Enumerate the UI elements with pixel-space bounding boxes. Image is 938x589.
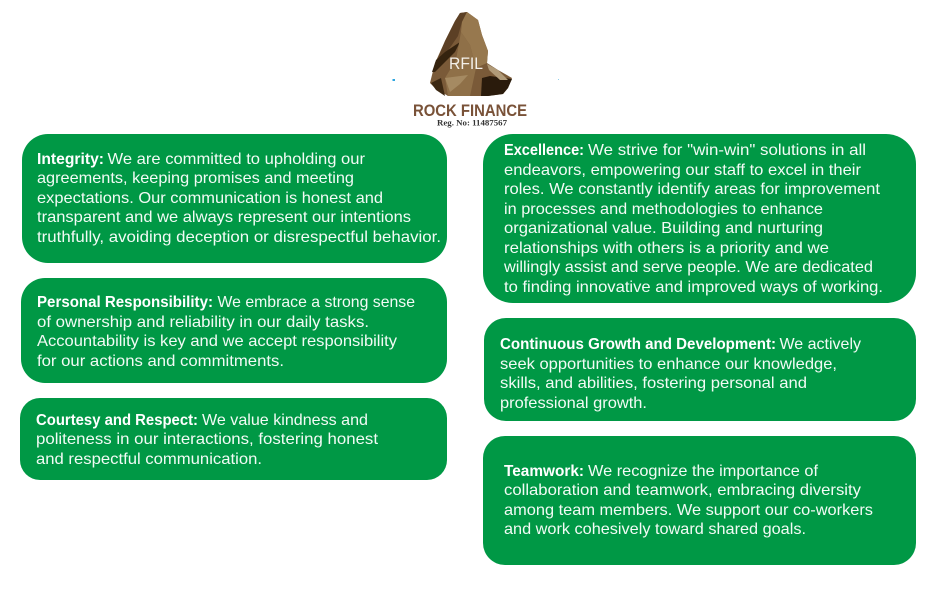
panel: excellence: roles. We constantly identify areas for improvement	[504, 181, 881, 198]
panel: courtesy and respect: politeness in our interactions, fostering honest	[36, 431, 379, 448]
panel: continuous growth and development	[484, 318, 916, 421]
panel: teamwork: collaboration and teamwork, embracing diversity	[504, 482, 861, 499]
panel: excellence: We strive for "win-win" solutions in all	[588, 142, 866, 159]
panel: integrity: transparent and we always represent our intentions	[37, 209, 411, 226]
panel: integrity	[22, 134, 447, 263]
panel: integrity: agreements, keeping promises and meeting	[37, 170, 354, 187]
panel: personal responsibility	[21, 278, 447, 383]
panel: teamwork: We recognize the importance of	[588, 463, 819, 480]
panel: personal responsibility: Personal Responsibility:	[37, 294, 213, 311]
panel: continuous growth and development: professional growth.	[500, 395, 647, 412]
panel: continuous growth and development: skills, and abilities, fostering personal and	[500, 375, 807, 392]
panel: personal responsibility: We embrace a strong sense	[218, 294, 415, 311]
panel: courtesy and respect: Courtesy and Respect:	[36, 412, 198, 429]
panel: excellence: endeavors, empowering our staff to excel in their	[504, 162, 862, 179]
panel: courtesy and respect: We value kindness and	[202, 412, 368, 429]
panel: continuous growth and development: We actively	[780, 336, 861, 353]
registration number: Reg. No: 11487567	[437, 118, 508, 128]
panel: excellence: relationships with others is a priority and we	[504, 240, 829, 257]
panel: teamwork: and work cohesively toward shared goals.	[504, 521, 806, 538]
icon: rock	[430, 12, 512, 96]
panel: teamwork: among team members. We support our co-workers	[504, 502, 873, 519]
panel: excellence: to finding innovative and improved ways of working.	[504, 279, 883, 296]
panel: personal responsibility: Accountability is key and we accept responsibility	[37, 333, 397, 350]
panel: integrity: expectations. Our communication is honest and	[37, 190, 383, 207]
panel: integrity: Integrity:	[37, 151, 104, 168]
panel: excellence: Excellence:	[504, 142, 584, 159]
panel: courtesy and respect	[20, 398, 447, 480]
panel: excellence: in processes and methodologies to enhance	[504, 201, 823, 218]
panel: courtesy and respect: and respectful communication.	[36, 451, 262, 468]
panel: personal responsibility: for our actions and commitments.	[37, 353, 284, 370]
panel: continuous growth and development: seek opportunities to enhance our knowledge,	[500, 356, 837, 373]
panel: excellence: organizational value. Building and nurturing	[504, 220, 823, 237]
company name: ROCK FINANCE	[413, 102, 527, 120]
panel: excellence: willingly assist and serve people. We are dedicated	[503, 259, 873, 276]
logo	[392, 12, 559, 128]
panel: personal responsibility: of ownership and reliability in our daily tasks.	[37, 314, 369, 331]
panel: teamwork	[483, 436, 916, 565]
panel: continuous growth and development: Continuous Growth and Development:	[500, 336, 776, 353]
panel: integrity: We are committed to upholding our	[108, 151, 366, 168]
panel: integrity: truthfully, avoiding deception or disrespectful behavior.	[37, 229, 441, 246]
panel: teamwork: Teamwork:	[504, 463, 584, 480]
rock label: RFIL	[449, 54, 483, 73]
panel: excellence	[483, 134, 916, 303]
